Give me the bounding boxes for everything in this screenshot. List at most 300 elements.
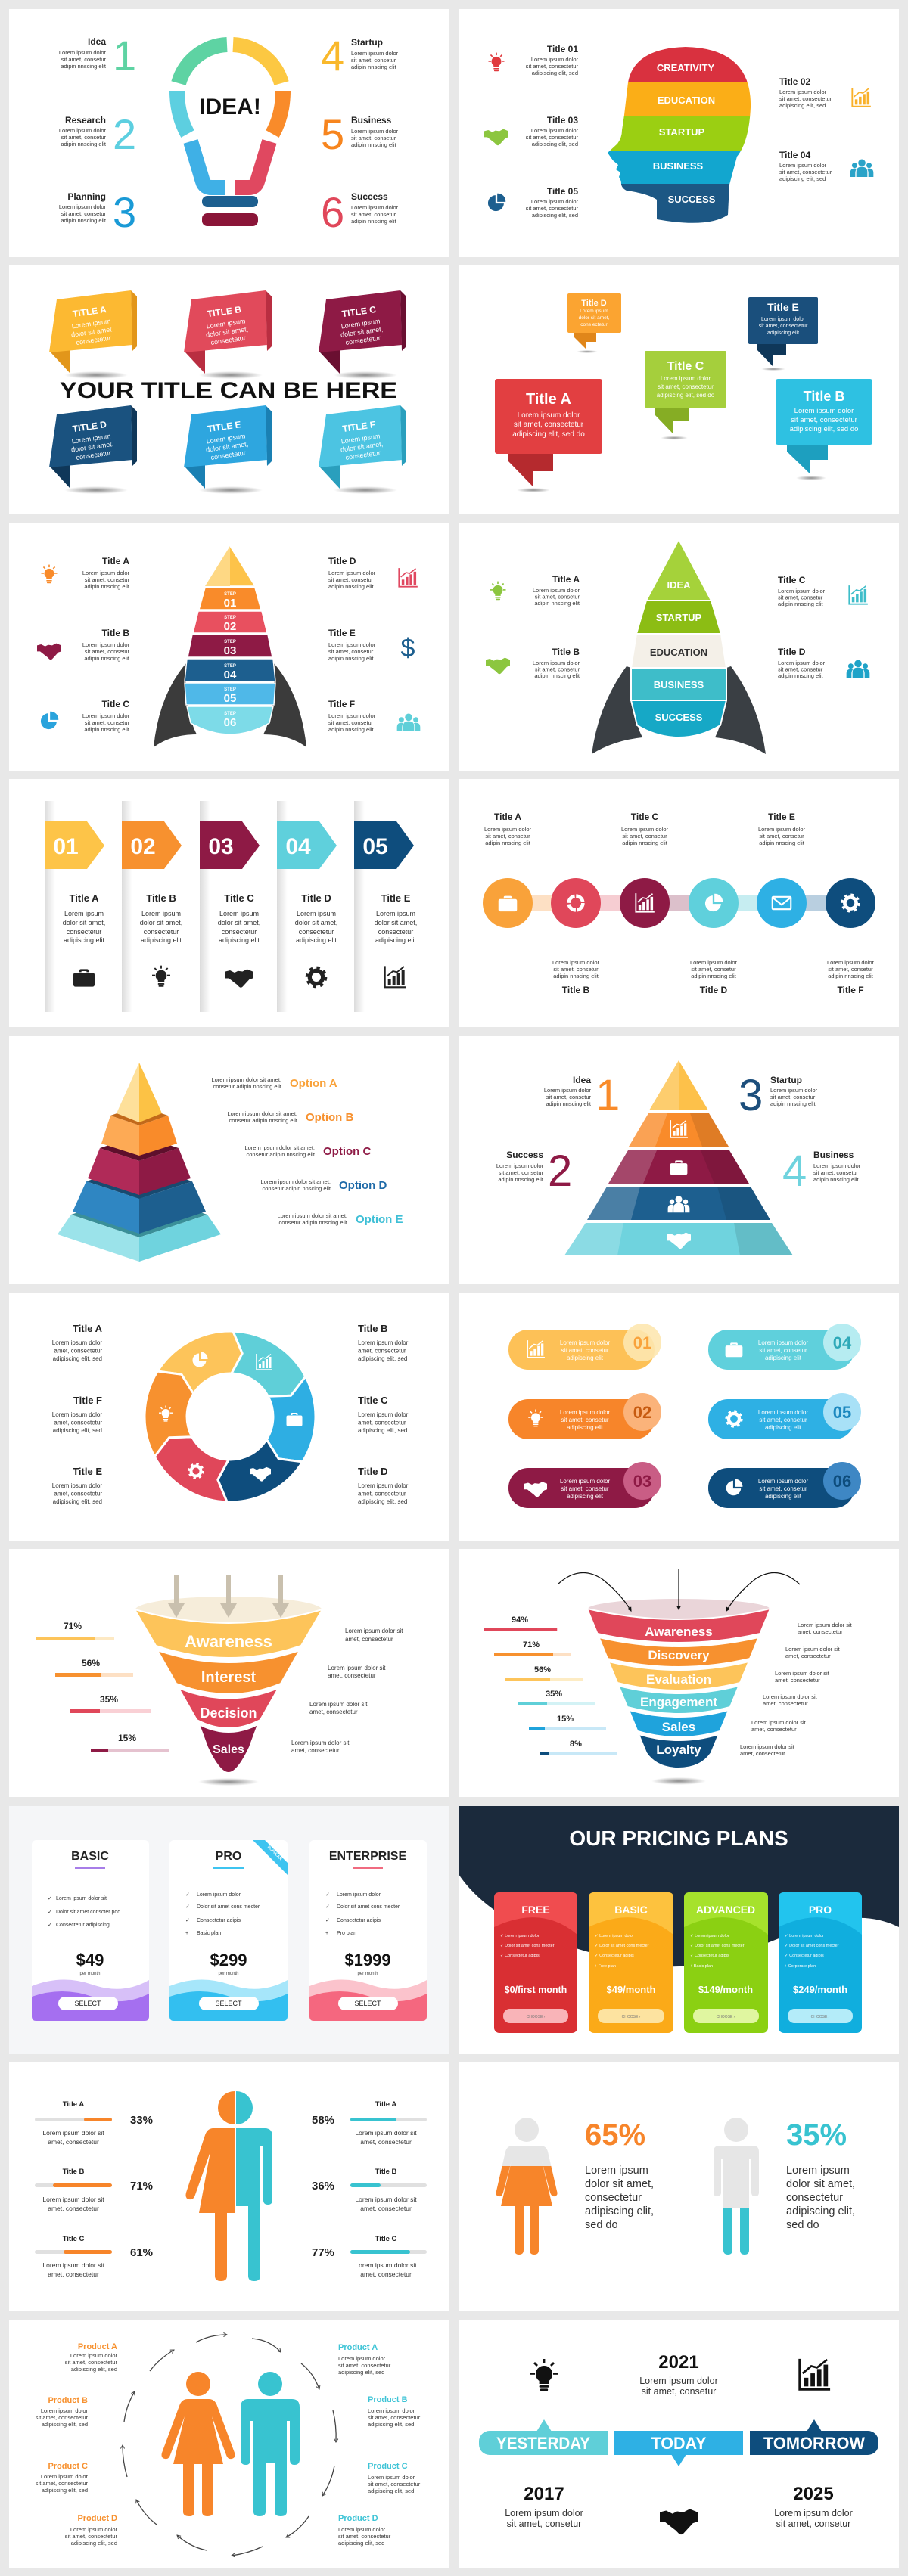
head band labels: EDUCATION [658,95,715,106]
bubble: title A: sit amet, consectetur [514,421,584,429]
item: success 2: Success [506,1150,543,1160]
item: title F: Lorem ipsum dolor [52,1411,102,1418]
side descriptions [291,1628,403,1754]
card: pro: PRO [809,1904,832,1916]
option A: consetur adipin nnscing elit [213,1083,282,1090]
pill 06: 06 [833,1472,851,1491]
option E [277,1212,403,1226]
timeline bar: TODAY [651,2434,707,2453]
bubble: title A: Lorem ipsum dolor [518,411,580,420]
panel: head profile [459,9,899,257]
item: title B: Lorem ipsum dolor [358,1339,409,1346]
step: success 6: Lorem ipsum dolor [351,204,399,211]
milestone 2025 [774,2484,853,2529]
percentage bars: 94% [512,1615,528,1625]
product labels left: sit amet, consectetur [65,2533,117,2540]
percentage bars: 15% [118,1733,136,1743]
item: title 03: sit amet, consectetur [526,134,578,141]
option C: Lorem ipsum dolor sit amet, [244,1144,315,1151]
funnel labels: Sales [213,1743,244,1756]
step labels [224,592,237,729]
column 05: Lorem ipsum [376,910,415,917]
item: title F: sit amet, consetur [328,719,374,726]
box: title A: Lorem ipsum [71,317,111,331]
column 05 [354,801,417,1012]
item: title F: adipiscing elit, sed [53,1427,102,1434]
funnel labels: Interest [201,1669,256,1686]
card: pro: per month [218,1972,239,1976]
card: advanced [684,1892,768,2033]
panel: rocket stages [459,523,899,771]
item: success 2: 2 [548,1147,572,1196]
side descriptions: Lorem ipsum dolor sit [345,1628,403,1634]
product labels left: Lorem ipsum dolor [41,2407,89,2414]
card: basic: Lorem ipsum dolor sit [56,1896,107,1901]
rocket fins [154,663,306,747]
icon: handshake [660,2509,698,2534]
pill 04: 04 [833,1333,852,1352]
panel: gender comparison bars [9,2062,449,2311]
card: enterprise: Lorem ipsum dolor [337,1892,381,1898]
side descriptions: amet, consectetur [328,1672,376,1679]
item: title C: adipiscing elit, sed [358,1427,407,1434]
product labels left: Product B [48,2396,88,2405]
timeline bar: TOMORROW [763,2434,865,2453]
stat 65%: consectetur [585,2192,642,2204]
item: title 04: sit amet, consectetur [779,169,832,175]
box: title F: TITLE F [342,419,376,434]
item: title E: sit amet, consetur [328,648,374,655]
card: pro: ✓ Lorem ipsum dolor [785,1934,824,1938]
item: title D: adipin nnscing elit [328,583,375,590]
column 04: Lorem ipsum [297,910,336,917]
pill 05: sit amet, consetur [759,1417,807,1423]
item: title D [358,1466,409,1505]
item: title A [52,1323,103,1362]
bubble: title E [748,297,818,371]
stage labels: STARTUP [656,612,702,623]
stat 35%: adipiscing elit, [786,2205,855,2218]
bottom labels: adipin nnscing elit [553,973,599,979]
bubble: title B [776,379,872,480]
step: idea 1: sit amet, consetur [61,56,106,63]
product labels right: adipiscing elit, sed [368,2421,414,2428]
milestone 2025: sit amet, consetur [776,2519,850,2529]
item: title B [37,628,130,662]
side descriptions [740,1622,853,1757]
step: business 5: 5 [321,110,344,158]
step: success 6 [321,188,399,236]
head band labels: CREATIVITY [657,62,714,73]
bubble: title B: adipiscing elit, sed do [790,425,858,433]
milestone 2017: 2017 [524,2484,564,2504]
stat 65%: dolor sit amet, [585,2178,654,2190]
panel: gender percentages [459,2062,899,2311]
step: research 2: adipin nnscing elit [61,141,107,147]
item: title 01: adipiscing elit, sed [532,70,578,76]
card: free: $0/first month [505,1985,567,1995]
right stat B: amet, consectetur [360,2205,412,2212]
head bands [608,47,751,223]
pill 03: sit amet, consetur [561,1485,609,1492]
item: title 03 [484,115,579,147]
left stat B [35,2168,153,2212]
item: title B [486,647,580,679]
item: title D: amet, consectetur [358,1490,406,1497]
column 01: consectetur [67,928,101,936]
box: title B: dolor sit amet, [205,325,249,339]
item: startup 3: Startup [770,1075,802,1085]
card: pro: SELECT [215,2000,242,2007]
box: title B: consectetur [210,334,246,346]
side descriptions: Lorem ipsum dolor sit [309,1701,368,1708]
side descriptions: amet, consectetur [291,1747,340,1754]
side descriptions: Lorem ipsum dolor sit [328,1665,386,1671]
option E: Option E [356,1213,403,1226]
item: title A: adipin nnscing elit [534,600,580,607]
stat 35%: sed do [786,2219,819,2231]
card: advanced: $149/month [698,1984,753,1995]
bottom labels: sit amet, consetur [828,966,873,973]
step: success 6: Success [351,191,388,202]
card: pro [779,1892,862,2033]
left stat A: amet, consectetur [48,2138,99,2146]
column 02 [122,801,182,1012]
item: title C [358,1395,409,1434]
pill 01: Lorem ipsum dolor [560,1339,610,1346]
column 03: consectetur [222,928,257,936]
left stat A: Lorem ipsum dolor sit [42,2129,104,2137]
item: title A [41,556,130,590]
box: title E: consectetur [210,449,246,461]
pill 05: Lorem ipsum dolor [758,1409,808,1416]
percentage bars: 15% [557,1715,574,1724]
panel: flat pyramid icons [459,1036,899,1284]
panel: cycle diagram [9,1293,449,1541]
step: success 6: 6 [321,188,344,236]
pill 06: sit amet, consetur [759,1485,807,1492]
funnel bands [135,1596,322,1773]
card: pro [169,1840,288,2021]
option A [211,1076,337,1090]
circle icons [483,878,875,928]
pill 02: sit amet, consetur [561,1417,609,1423]
milestone 2021 [639,2352,718,2397]
item: title B: Title B [102,628,129,638]
funnel labels [640,1625,717,1757]
item: title D: Lorem ipsum dolor [328,570,376,576]
step: startup 4: adipin nnscing elit [351,64,397,70]
item: idea 1 [544,1071,620,1120]
left stat B: Title B [63,2168,85,2176]
column 02: Title B [146,892,176,904]
product labels left: Product C [48,2462,88,2471]
box: title F: consectetur [345,449,381,461]
card: pro: ✓ [185,1892,190,1898]
column 02: dolor sit amet, [140,919,182,926]
card: pro: ✓ Consectetur adipis [785,1954,824,1958]
box: title D: Lorem ipsum [71,432,111,445]
card: basic: BASIC [71,1850,109,1863]
dark header background [459,1806,899,1966]
card: pro: Dolor sit amet cons mecter [197,1904,260,1910]
step labels: STEP [224,616,236,620]
top labels: sit amet, consetur [485,833,530,840]
option A: Lorem ipsum dolor sit amet, [211,1076,281,1083]
bubble: title A [495,379,602,492]
top labels: Title A [494,812,521,822]
item: title 02: Lorem ipsum dolor [779,88,827,95]
item: title F [328,699,420,733]
left stat A [35,2100,153,2146]
pill 03: Lorem ipsum dolor [560,1478,610,1485]
right stat B [312,2168,427,2212]
column 04: Title D [301,892,331,904]
man figure [241,2372,300,2516]
step: idea 1: adipin nnscing elit [61,63,107,70]
item: success 2: adipin nnscing elit [498,1176,544,1183]
card: enterprise: Dolor sit amet cons mecter [337,1904,400,1910]
column 04: adipiscing elit [296,936,337,944]
stat 35%: dolor sit amet, [786,2178,855,2190]
pill 05: adipiscing elit [765,1424,802,1431]
box: title C: Lorem ipsum [340,317,381,331]
box: title D: TITLE D [72,419,107,434]
product labels right: Product A [338,2343,378,2352]
percentage bars [36,1621,169,1752]
item: title B: adipiscing elit, sed [358,1355,407,1362]
card: enterprise [309,1840,427,2021]
item: title A: Title A [73,1323,103,1334]
side descriptions: amet, consectetur [751,1726,797,1733]
bubble: title B: Lorem ipsum dolor [794,407,854,415]
bubble: title D [568,293,621,353]
column 01: dolor sit amet, [63,919,105,926]
step labels: 06 [224,716,236,729]
stat 65% [585,2118,654,2231]
item: title E: amet, consectetur [54,1490,102,1497]
column 02: consectetur [144,928,179,936]
item: title 04: adipiscing elit, sed [779,175,826,182]
item: business 4: Business [813,1150,854,1160]
right stat C: Lorem ipsum dolor sit [355,2261,417,2269]
split figure [186,2091,272,2281]
card: advanced: ✓ Dolor sit amet cons mecter [690,1944,745,1948]
option D: Lorem ipsum dolor sit amet, [260,1178,331,1185]
bubble: title E: sit amet, consectetur [759,324,808,329]
side descriptions: Lorem ipsum dolor sit [763,1693,818,1700]
option D [260,1178,387,1192]
item: title A: amet, consectetur [54,1348,102,1354]
card: free: ✓ Consectetur adipis [500,1954,540,1958]
item: startup 3: 3 [739,1071,763,1120]
item: title C: Lorem ipsum dolor [778,588,826,594]
column 01 [45,801,105,1012]
heading: OUR PRICING PLANS [569,1826,788,1850]
product labels left: adipiscing elit, sed [71,2540,117,2547]
step: idea 1: Lorem ipsum dolor [59,49,107,56]
item: title D: sit amet, consetur [328,576,374,583]
stat 65%: 65% [585,2118,645,2152]
card: pro: $299 [210,1951,247,1969]
box: title C: TITLE C [341,304,377,319]
item: startup 3: adipin nnscing elit [770,1100,816,1107]
top labels: adipin nnscing elit [622,840,668,846]
item: title 05: Title 05 [547,186,578,197]
card: pro: Basic plan [197,1931,221,1936]
item: title E: adipiscing elit, sed [53,1498,102,1505]
card: pro: $249/month [793,1984,847,1995]
card: basic: BASIC [614,1904,648,1916]
card: pro: + [185,1931,188,1936]
box: title E: dolor sit amet, [205,440,249,454]
bubble: title C: adipiscing elit, sed do [657,392,715,399]
bubble: title D: Lorem ipsum [580,309,608,314]
step labels: 03 [224,644,236,657]
option E: consetur adipin nnscing elit [279,1219,348,1226]
item: title C: amet, consectetur [358,1419,406,1426]
item: title C: Lorem ipsum dolor [82,712,130,719]
panel: yesterday today tomorrow timeline [459,2320,899,2568]
item: title C: sit amet, consetur [85,719,129,726]
option B [227,1110,353,1124]
box: title D [49,405,137,494]
box: title E: TITLE E [207,419,241,434]
left stat B: 71% [130,2180,153,2193]
item: title 04: Title 04 [779,150,810,160]
item: title 01: Title 01 [547,44,578,54]
head band labels: SUCCESS [668,194,716,205]
option A: Option A [290,1077,337,1090]
column 02: adipiscing elit [141,936,182,944]
step: idea 1 [59,32,136,79]
card: advanced: CHOOSE › [717,2015,735,2019]
item: title A: Title A [552,574,580,585]
bubble: title B: Title B [804,389,844,404]
percentage bars: 56% [82,1658,100,1668]
item: title C: Lorem ipsum dolor [358,1411,409,1418]
pill 03 [508,1462,661,1508]
item: title C: Title C [778,575,806,585]
item: business 4: sit amet, consetur [813,1169,859,1176]
bottom labels: Lorem ipsum dolor [827,959,875,966]
column 03: Lorem ipsum [219,910,259,917]
left stat B: amet, consectetur [48,2205,99,2212]
item: title F: amet, consectetur [54,1419,102,1426]
box: title A [49,290,137,379]
pill 02 [508,1393,661,1439]
connectors [529,895,829,911]
rocket body steps [185,546,275,734]
step: startup 4: Startup [351,37,383,48]
step: research 2: Research [65,115,106,126]
right stat C: Title C [375,2235,397,2243]
funnel labels: Evaluation [646,1672,711,1687]
column 05: 05 [362,834,388,859]
item: title 03: adipiscing elit, sed [532,141,578,147]
milestone 2021: 2021 [658,2352,699,2373]
card: basic: $49/month [606,1984,656,1995]
item: idea 1: adipin nnscing elit [546,1100,592,1107]
top labels: adipin nnscing elit [759,840,805,846]
stat 35% [786,2118,855,2231]
pill 03: adipiscing elit [567,1493,604,1500]
box: title B: Lorem ipsum [206,317,246,331]
column 03: Title C [224,892,254,904]
card: basic: ✓ Lorem ipsum dolor [595,1934,634,1938]
bubble: title D: dolor sit amet, [579,315,610,321]
step: business 5 [321,110,399,158]
input arrows [168,1575,289,1618]
cycle arrows [123,2335,336,2556]
product labels right: Product B [368,2395,408,2404]
bubble: title C: sit amet, consectetur [658,383,714,390]
side descriptions: amet, consectetur [345,1636,393,1643]
left stat B: Lorem ipsum dolor sit [42,2196,104,2203]
column 02: 02 [130,834,156,859]
item: title B: adipin nnscing elit [84,655,130,662]
step: business 5: sit amet, consetur [351,135,396,141]
pyramid levels [564,1060,793,1255]
step: business 5: Lorem ipsum dolor [351,128,399,135]
step labels: STEP [224,664,236,669]
option C [244,1144,371,1158]
funnel shadow [651,1777,706,1785]
side descriptions: amet, consectetur [798,1628,843,1635]
pill 02: 02 [633,1403,651,1422]
stage labels: SUCCESS [655,712,703,723]
item: title E: Title E [73,1466,102,1477]
product labels left: sit amet, consectetur [65,2359,117,2366]
column 01: Title A [69,892,99,904]
product labels right: Product C [368,2462,408,2471]
item: title A: sit amet, consetur [85,576,129,583]
card: enterprise: + [325,1931,328,1936]
product labels right: adipiscing elit, sed [338,2369,384,2376]
box: title C: dolor sit amet, [340,325,384,339]
step: planning 3: 3 [113,188,136,236]
pill 04: Lorem ipsum dolor [758,1339,808,1346]
item: title C: adipin nnscing elit [84,726,130,733]
step: idea 1: 1 [113,32,136,79]
item: title D: Lorem ipsum dolor [778,660,826,666]
bubble: title E: adipiscing elit [767,331,799,336]
top labels: adipin nnscing elit [485,840,531,846]
column 05: Title E [381,892,411,904]
box: title F: dolor sit amet, [340,440,384,454]
bubble: title C: Title C [667,360,704,373]
item: startup 3: sit amet, consetur [770,1094,816,1100]
box: title C: consectetur [345,334,381,346]
step labels: STEP [224,687,236,692]
right stat C: amet, consectetur [360,2270,412,2278]
option B: consetur adipin nnscing elit [229,1117,298,1124]
milestone 2017 [505,2484,583,2529]
percentage bars: 71% [64,1621,82,1631]
top labels [484,812,806,846]
column 04: dolor sit amet, [295,919,337,926]
panel: sales funnel 4 [9,1549,449,1797]
card: enterprise: Consectetur adipis [337,1918,381,1923]
item: business 4 [782,1147,861,1196]
step: planning 3: Planning [67,191,106,202]
item: title E: Title E [328,628,356,638]
card: pro: POPULAR [266,1845,283,1861]
bottom labels: sit amet, consetur [553,966,599,973]
card: basic: ✓ [48,1923,52,1928]
item: title E: Lorem ipsum dolor [52,1482,102,1489]
input arrows [558,1569,800,1611]
